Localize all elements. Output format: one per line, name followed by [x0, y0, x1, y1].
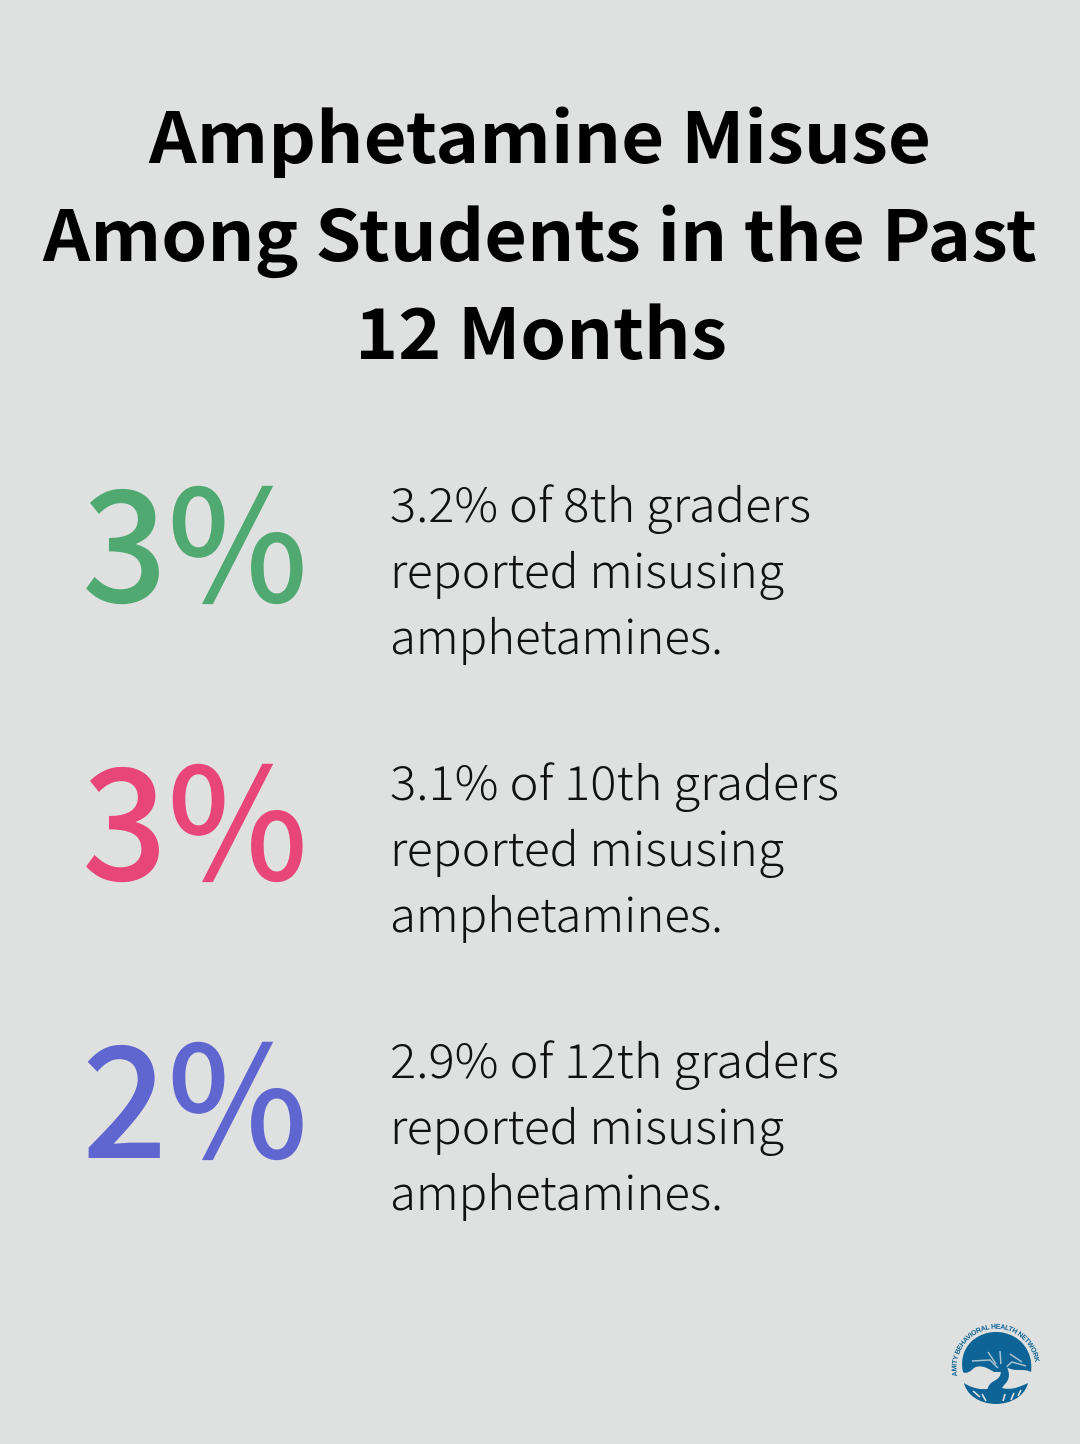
stat row: 8th graders	[82, 422, 811, 668]
icon: roots bowl	[964, 1383, 1028, 1404]
description: 8th graders: 3.2% of 8th graders	[390, 467, 811, 536]
description: 8th graders	[390, 467, 811, 668]
stat value: 2% blue: 2%	[82, 978, 308, 1203]
icon: tree trunk	[987, 1364, 1009, 1396]
stat row: 10th graders	[82, 700, 839, 946]
title	[42, 83, 1037, 380]
icon: tree canopy	[962, 1332, 1031, 1373]
description: 10th graders: 3.1% of 10th graders	[390, 745, 839, 814]
description: 12th graders: amphetamines.	[390, 1155, 723, 1224]
stat value: 3% pink: 3%	[82, 700, 308, 925]
title: Amphetamine Misuse	[148, 83, 931, 184]
description: 12th graders: reported misusing	[390, 1089, 784, 1158]
description: 10th graders: amphetamines.	[390, 877, 723, 946]
stat value: 3% green: 3%	[82, 422, 308, 647]
logo ring text: AMITY BEHAVIORAL HEALTH NETWORK	[952, 1324, 1040, 1376]
description: 8th graders: reported misusing	[390, 533, 784, 602]
title: Among Students in the Past	[42, 181, 1037, 282]
title: 12 Months	[355, 279, 727, 380]
description: 8th graders: amphetamines.	[390, 599, 723, 668]
icon: root gaps	[973, 1390, 1021, 1401]
description: 10th graders: reported misusing	[390, 811, 784, 880]
logo: Amity Behavioral Health Network	[952, 1324, 1040, 1404]
description: 12th graders: 2.9% of 12th graders	[390, 1023, 839, 1092]
stat row: 12th graders	[82, 978, 839, 1224]
description: 10th graders	[390, 745, 839, 946]
description: 12th graders	[390, 1023, 839, 1224]
icon: tree branches	[972, 1351, 1026, 1370]
